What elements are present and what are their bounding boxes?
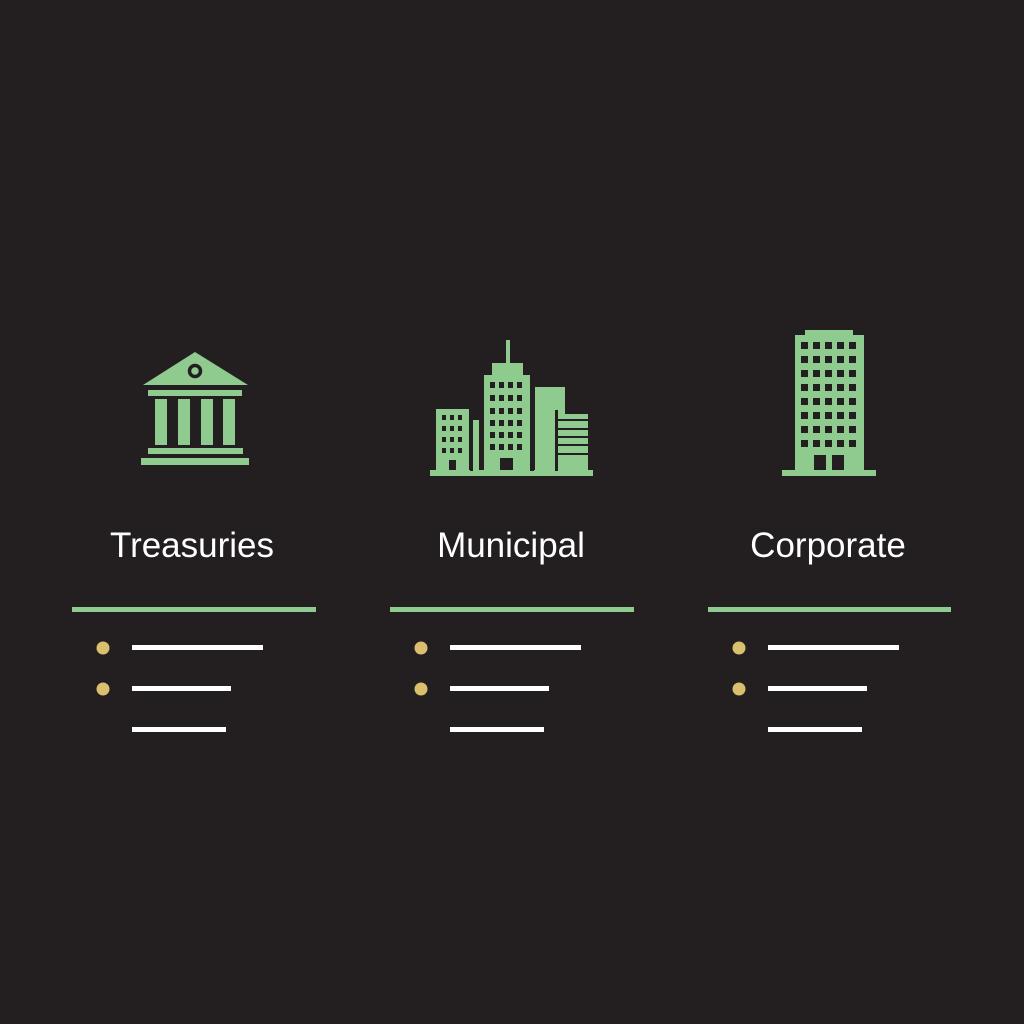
panel: municipal bbox=[390, 340, 634, 732]
heading: Municipal: Municipal bbox=[437, 526, 585, 565]
heading: Treasuries: Treasuries bbox=[110, 526, 274, 565]
divider line bbox=[390, 607, 634, 612]
icon: office tower bbox=[782, 330, 876, 476]
panel: corporate bbox=[708, 330, 951, 732]
bullet list bbox=[732, 642, 899, 732]
panel: treasuries bbox=[72, 352, 316, 732]
heading: Corporate: Corporate bbox=[750, 526, 906, 565]
bullet list bbox=[414, 642, 581, 732]
divider line bbox=[708, 607, 951, 612]
icon: government bank building bbox=[141, 352, 249, 465]
bullet list bbox=[96, 642, 263, 732]
icon: city skyline bbox=[430, 340, 593, 476]
divider line bbox=[72, 607, 316, 612]
